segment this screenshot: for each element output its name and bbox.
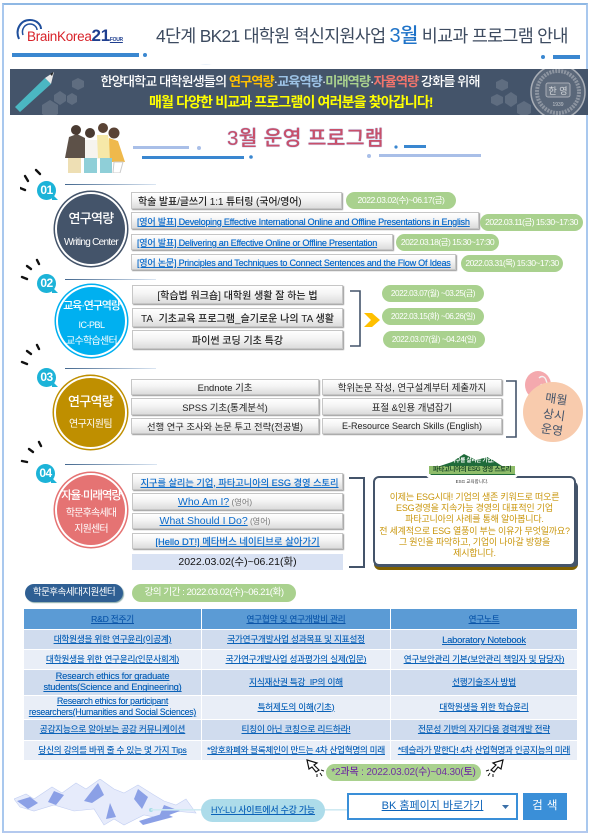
course table: 연구보안관리 기본(보안관리 책임자 및 담당자): [404, 654, 564, 664]
row: Python: [132, 330, 343, 349]
date pill: 2022.03.07(월) ~04.24(일): [392, 335, 476, 344]
course table: 대학원생을 위한 연구윤리(이공계): [54, 634, 171, 644]
icon: university seal: 1939: [552, 102, 564, 108]
row: thesis writing: [322, 379, 502, 395]
icon: cursor right: [486, 759, 504, 777]
date pill: [480, 214, 583, 231]
course table: [24, 609, 577, 760]
section connector line: [65, 184, 156, 185]
row: Patagonia ESG: 지구를 살리는 기업, 파타고니아의 ESG 경영 스토리: [141, 478, 338, 488]
course table: R&D 전주기: [91, 614, 134, 624]
row: Who Am I: Who Am I?: [178, 496, 229, 508]
row: Who Am I: [132, 493, 343, 510]
icon: university seal: 한 영: [548, 86, 568, 96]
row: online presentation: [영어 발표] Delivering an Effective Online or Offline Presentation: [137, 238, 377, 248]
header: [12, 19, 580, 65]
dropdown: BK homepage: [347, 793, 518, 820]
course table: 특허제도의 이해(기초): [258, 702, 334, 712]
row: TA training: [132, 308, 343, 327]
date pill: [396, 234, 499, 251]
banner: [10, 69, 588, 115]
row: presentations in English: [영어 발표] Developing Effective International Online and Offline Presentations in English: [137, 216, 470, 226]
course table: 대학원생을 위한 학습윤리: [439, 702, 529, 712]
course table: 선행기술조사 방법: [452, 677, 516, 687]
note: monthly always open: 운영: [540, 421, 564, 438]
accent rays: [20, 440, 42, 464]
connector line: [149, 808, 347, 812]
row: tutoring: [131, 192, 342, 209]
circle: IC-PBL center: IC-PBL: [78, 320, 104, 330]
course table: 국가연구개발사업 성과평가의 실제(입문): [226, 654, 366, 664]
circle: 연구지원팀: 연구지원팀: [69, 419, 112, 430]
banner text line 1: 한양대학교 대학원생들의 연구역량·교육역량·미래역량·자율역량 강화를 위해: [100, 74, 480, 89]
course table: 대학원생을 위한 연구윤리(인문사회계): [46, 654, 179, 664]
date pill: [382, 308, 484, 325]
panel: 03 research support team: [20, 344, 583, 450]
date pill: 2022.03.07(월) ~03.25(금): [391, 289, 475, 298]
date pill: [346, 192, 456, 209]
row: sentences and ideas: [영어 논문] Principles and Techniques to Connect Sentences and the Flow Of Ideas: [137, 258, 451, 268]
row: tutoring: 학술 발표/글쓰기 1:1 튜터링 (국어/영어): [138, 197, 302, 208]
row: presentations in English: [131, 212, 479, 229]
header underlines: [12, 53, 580, 65]
badge 02: [37, 274, 56, 293]
label pill: 학문후속세대지원센터: [25, 584, 123, 602]
panel: 01 research competency, Writing Center: [20, 168, 583, 272]
row: literature review: 선행 연구 조사와 논문 투고 전략(전공별): [147, 422, 303, 432]
badge 03: 03: [40, 370, 53, 384]
row: What Should I Do: [132, 513, 343, 529]
badge 04: 04: [39, 466, 52, 480]
row: TA training: TA 기초교육 프로그램_슬기로운 나의 TA 생활: [141, 314, 334, 325]
row: e-resource: [322, 418, 502, 434]
panel: 02 teaching competency, IC-PBL: [20, 258, 485, 358]
circle: 연구역량 Writing Center: 연구역량: [68, 211, 114, 226]
row: Python: 파이썬 코딩 기초 특강: [192, 336, 283, 347]
circle: 연구역량 Writing Center: [55, 192, 127, 266]
date pill: 2022.03.31(목) 15:30~17:30: [465, 258, 559, 268]
ESG mountain title graphic: ESG 교육합니다.: [456, 479, 488, 484]
accent rays: [20, 258, 40, 280]
illustration: mountains: [14, 779, 196, 826]
ESG mountain title graphic: [424, 451, 520, 489]
circle: IC-PBL center: 교육·연구역량: [63, 300, 120, 312]
badge 03: [37, 368, 56, 387]
row: What Should I Do: (영어): [250, 517, 270, 526]
circle: IC-PBL center: 교수학습센터: [66, 336, 117, 347]
decorative hexagons left: [42, 78, 84, 115]
row: online presentation: [131, 234, 393, 250]
ESG mountain title graphic: 파타고니아의 ESG 경영 스토리: [433, 466, 511, 473]
panel: 04 future competency: [20, 440, 578, 570]
course table: *테슬라가 말한다! 4차 산업혁명과 인공지능의 미래: [398, 745, 570, 755]
decorative hexagons right: [491, 79, 531, 115]
bracket: [350, 290, 361, 347]
date pill: 2 courses: *2과목 : 2022.03.02(수)~04.30(토): [331, 767, 476, 778]
section connector line: [65, 368, 156, 369]
dropdown: BK homepage: BK 홈페이지 바로가기: [382, 800, 483, 812]
row: plagiarism: 표절 &인용 개념잡기: [372, 402, 452, 412]
bracket: [349, 477, 365, 568]
callout: ESG lecture description: 이제는 ESG시대! 기업의 생존 키워드로 떠오른: [390, 492, 559, 502]
row: SPSS: [131, 398, 319, 415]
bracket: [506, 380, 517, 438]
site notice pill: [201, 799, 325, 822]
search button: [523, 793, 567, 820]
date pill: [461, 255, 563, 272]
course table: *암호화폐와 블록체인이 만드는 4차 산업혁명의 미래: [207, 745, 385, 755]
note: monthly always open: 매월: [544, 391, 568, 408]
ESG mountain title graphic: 지구를 살리는 기업,: [451, 458, 493, 464]
course table: 공감지능으로 알아보는 공감 커뮤니케이션: [40, 724, 185, 734]
circle: IC-PBL center: [56, 285, 127, 357]
course table: Laboratory Notebook: [442, 634, 526, 645]
badge 02: 02: [40, 276, 53, 290]
circle: 학문후속세대 지원센터: 학문후속세대: [66, 508, 116, 519]
row: study workshop: [학습법 워크숍] 대학원 생활 잘 하는 법: [157, 291, 318, 302]
row: Hello DT: [Hello DT!] 메타버스 네이티브로 살아가기: [155, 536, 320, 547]
note: monthly always open: 상시: [542, 406, 566, 423]
row: Patagonia ESG: [132, 473, 343, 490]
circle: 학문후속세대 지원센터: 자율·미래역량: [61, 490, 121, 502]
site notice pill: HY-LU 사이트에서 수강 가능: [211, 805, 315, 815]
row: sentences and ideas: [131, 254, 456, 270]
row: thesis writing: 학위논문 작성, 연구설계부터 제출까지: [338, 382, 486, 393]
dropdown arrow: [502, 805, 509, 809]
row: Endnote: Endnote 기초: [198, 382, 252, 393]
accent rays: [20, 168, 42, 192]
date pill: [383, 331, 485, 348]
row: study workshop: [132, 285, 343, 304]
icon: cursor left: [306, 759, 324, 777]
badge 01: [37, 181, 56, 200]
date pill: 2022.03.15(화) ~06.26(일): [391, 312, 475, 321]
note: monthly always open: [523, 371, 583, 442]
badge 01: 01: [40, 183, 53, 197]
lecture period pill: 강의 기간 : 2022.03.02(수)~06.21(화): [144, 587, 284, 598]
title: 4단계 BK21 대학원 혁신지원사업 3월 비교과 프로그램 안내: [156, 25, 568, 47]
lecture period pill: [132, 584, 296, 602]
illustration: students: [65, 123, 125, 173]
row: Endnote: [131, 379, 319, 395]
date pill: 2 courses: [326, 764, 481, 781]
course table: 연구노트: [469, 614, 499, 624]
circle: 연구지원팀: [54, 376, 127, 449]
circle: 연구지원팀: 연구역량: [68, 394, 113, 409]
logo: BrainKorea21 FOUR: BrainKorea21FOUR: [27, 26, 123, 45]
row: SPSS: SPSS 기초(통계분석): [182, 402, 268, 412]
row: What Should I Do: What Should I Do?: [160, 515, 248, 527]
row: Who Am I: (영어): [232, 498, 252, 506]
date strip: [132, 554, 343, 570]
icon: pencil: [15, 72, 54, 112]
course table: 국가연구개발사업 성과목표 및 지표설정: [227, 634, 365, 644]
callout: ESG lecture description: [373, 476, 578, 570]
accent rays: [20, 344, 40, 366]
icon: university seal: [530, 69, 586, 115]
course table: Research ethics for graduate students(Science and Engineering): [43, 671, 182, 692]
arrow: chevron: [364, 313, 380, 327]
course table: 당신의 강의를 바꿔 줄 수 있는 몇 가지 Tips: [38, 745, 187, 755]
badge 04: [36, 464, 55, 483]
date pill: [382, 285, 484, 302]
course table: 지식재산권 특강_IP의 이해: [249, 677, 343, 687]
row: literature review: [131, 418, 319, 434]
date pill: 2022.03.11(금) 15:30~17:30: [485, 217, 578, 227]
callout: ESG lecture description: 그 원인을 파악하고, 기업이 나아갈 방향을: [399, 537, 550, 547]
row: Hello DT: [132, 533, 343, 549]
heading decorative lines: [133, 145, 481, 159]
circle: 학문후속세대 지원센터: 지원센터: [74, 524, 108, 535]
callout: ESG lecture description: ESG경영을 지속가능 경영의 대표적인 기업: [396, 503, 553, 513]
course table: 연구협약 및 연구개발비 관리: [246, 614, 346, 624]
program heading group: [65, 123, 481, 173]
date strip: 2022.03.02(수)~06.21(화): [178, 556, 297, 568]
course table: 전문성 기반의 자기다움 경력개발 전략: [418, 724, 550, 734]
callout: ESG lecture description: 파타고니아의 사례를 통해 알아봅니다.: [405, 514, 544, 524]
banner text line 2: 매월 다양한 비교과 프로그램이 여러분을 찾아갑니다!: [149, 94, 433, 110]
date pill: 2022.03.18(금) 15:30~17:30: [401, 237, 494, 247]
label pill: 학문후속세대지원센터: 학문후속세대지원센터: [33, 587, 115, 598]
heading: 3월 운영 프로그램: [227, 127, 384, 150]
section connector line: [65, 279, 156, 280]
date pill: 2022.03.02(수)~06.17(금): [358, 195, 444, 205]
row: e-resource: E-Resource Search Skills (English): [342, 421, 482, 431]
row: plagiarism: [322, 398, 502, 415]
search button: 검 색: [532, 800, 558, 812]
section connector line: [65, 464, 157, 465]
circle: 학문후속세대 지원센터: [55, 473, 127, 547]
callout: ESG lecture description: 제시합니다.: [453, 548, 496, 558]
logo: BrainKorea21 FOUR: [16, 19, 123, 45]
callout: ESG lecture description: 전 세계적으로 ESG 열풍이 부는 이유가 무엇일까요?: [379, 526, 570, 536]
course table: 티칭이 아닌 코칭으로 리드하라!: [242, 724, 350, 734]
course table: Research ethics for participant researchers(Humanities and Social Sciences): [29, 696, 196, 717]
circle: 연구역량 Writing Center: Writing Center: [64, 237, 118, 248]
